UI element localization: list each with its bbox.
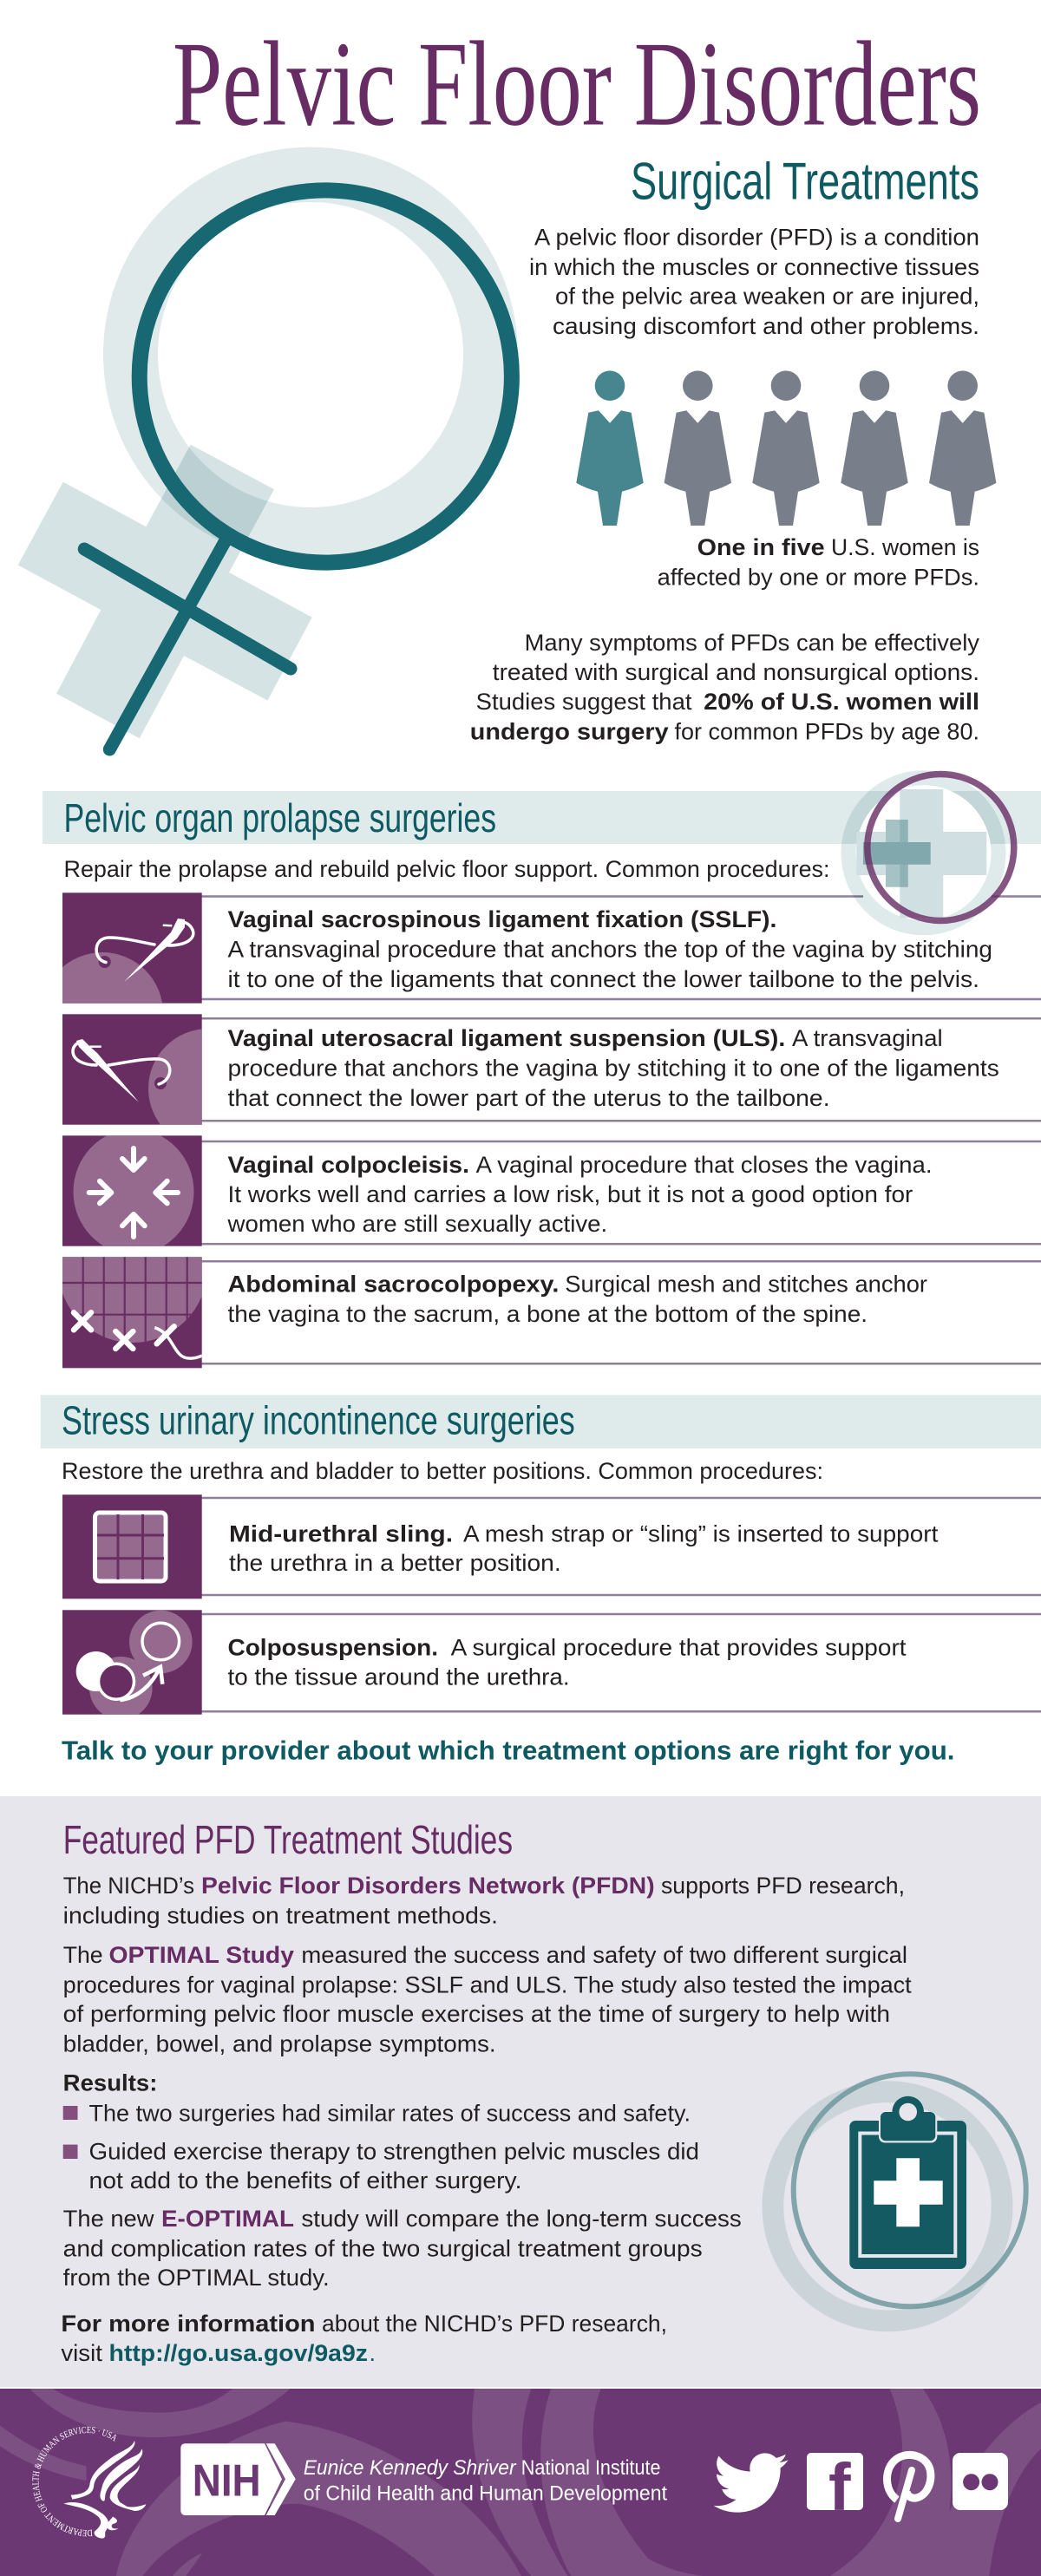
text block: treatment summary: treated with surgical and nonsurgical options. [493,659,979,685]
text block: more information: . [370,2340,376,2366]
icon row: one in five women [576,370,996,526]
logo: NIH [180,2443,296,2515]
text block: OPTIMAL study: The [63,1942,103,1968]
results list: The two surgeries had similar rates of success and safety. [88,2100,691,2126]
icon: lifted urethra [62,1610,202,1720]
results list: Results: [63,2070,157,2096]
text block: treatment summary: for common PFDs by age 80. [675,718,979,744]
text block: E-OPTIMAL: and complication rates of the two surgical treatment groups [63,2236,703,2262]
procedure: colposuspension: to the tissue around the urethra. [227,1664,570,1690]
text block: more information: For more information [61,2311,316,2337]
text block: E-OPTIMAL: The new [63,2206,154,2232]
procedure: mid-urethral sling: A mesh strap or “sling” is inserted to support [463,1520,939,1546]
procedure: ULS: that connect the lower part of the uterus to the tailbone. [227,1085,830,1111]
text block: treatment summary: 20% of U.S. women will [704,689,979,715]
procedure: colpocleisis: women who are still sexually active. [226,1211,607,1237]
text block: definition: in which the muscles or connective tissues [529,254,979,280]
text block: E-OPTIMAL: E-OPTIMAL [161,2206,294,2232]
procedure: ULS [201,1018,1041,1121]
text block: PFDN: including studies on treatment methods. [63,1902,498,1928]
results list: Guided exercise therapy to strengthen pelvic muscles did [88,2139,699,2165]
section heading band [43,791,1041,844]
text block: PFDN [63,1873,905,1928]
procedure: sacrocolpopexy [201,1261,1041,1363]
procedure: colposuspension: Colposuspension. [227,1634,438,1660]
text block: OPTIMAL study: procedures for vaginal prolapse: SSLF and ULS. The study also tested the impact [63,1971,912,1997]
procedure: colposuspension: A surgical procedure that provides support [451,1634,907,1660]
text block: definition: causing discomfort and other problems. [553,313,979,339]
section heading band: Pelvic organ prolapse surgeries [64,795,496,840]
section intro: Restore the urethra and bladder to better positions. Common procedures: [62,1458,823,1484]
section intro: Repair the prolapse and rebuild pelvic floor support. Common procedures: [64,856,829,882]
procedure: colposuspension [201,1614,1041,1711]
text block: one in five [658,534,979,590]
procedure: mid-urethral sling: Mid-urethral sling. [229,1520,453,1546]
text block: PFDN: Pelvic Floor Disorders Network (PFDN) [201,1873,655,1899]
section heading: Featured PFD Treatment Studies [63,1817,513,1862]
procedure: sacrocolpopexy: Abdominal sacrocolpopexy. [227,1272,559,1298]
text block: E-OPTIMAL [63,2206,742,2291]
text block: E-OPTIMAL: study will compare the long-term success [301,2206,742,2232]
text block: OPTIMAL study [63,1942,912,2056]
section heading band: Stress urinary incontinence surgeries [62,1397,575,1442]
icon: facebook [807,2450,863,2525]
text block: more information [61,2311,667,2366]
text block: treatment summary: Many symptoms of PFDs can be effectively [525,630,979,656]
procedure: colpocleisis: It works well and carries a low risk, but it is not a good option for [227,1181,913,1207]
results list [63,2070,699,2194]
icon: needle and thread [62,892,202,1004]
icon: mesh sling [62,1494,202,1599]
text block: PFDN: The NICHD’s [63,1873,194,1899]
text block: E-OPTIMAL: from the OPTIMAL study. [63,2265,330,2291]
icon: flickr [953,2453,1008,2510]
text block: treatment summary: Studies suggest that [476,689,692,715]
icon: female symbol [18,147,518,749]
procedure: mid-urethral sling: the urethra in a better position. [229,1550,561,1576]
text block: definition: A pelvic floor disorder (PFD) is a condition [534,224,979,250]
procedure: ULS: A transvaginal [792,1025,943,1051]
procedure: SSLF: Vaginal sacrospinous ligament fixation (SSLF). [227,906,776,932]
panel: featured PFD treatment studies [0,1796,1041,2387]
callout: talk to provider: Talk to your provider about which treatment options are right for you. [62,1735,954,1765]
text block: OPTIMAL study: of performing pelvic floor muscle exercises at the time of surgery to help with [63,2001,890,2027]
procedure: SSLF: A transvaginal procedure that anchors the top of the vagina by stitching [227,937,992,963]
footer [0,2389,1041,2576]
text block: one in five: U.S. women is [831,534,979,560]
procedure: ULS: Vaginal uterosacral ligament suspension (ULS). [227,1025,785,1051]
text block: more information: visit [61,2340,102,2366]
icon: facebook: f [828,2450,851,2525]
section heading band [41,1395,1041,1448]
text block: OPTIMAL study: bladder, bowel, and prolapse symptoms. [63,2030,496,2056]
results list: not add to the benefits of either surgery. [88,2167,522,2194]
text block: more information: about the NICHD’s PFD research, [322,2311,667,2337]
logo: HHS seal: DEPARTMENT OF HEALTH & HUMAN SERVICES · USA [32,2427,116,2536]
institute name: of Child Health and Human Development [304,2482,667,2506]
icon: inward arrows [62,1135,202,1246]
text block: treatment summary: undergo surgery [470,718,669,744]
procedure: SSLF: it to one of the ligaments that connect the lower tailbone to the pelvis. [227,966,979,992]
icon: surgical mesh [62,1257,202,1369]
text block: OPTIMAL study: OPTIMAL Study [109,1942,294,1968]
institute name [304,2456,667,2506]
panel: pelvic organ prolapse surgeries [42,774,1041,1368]
text block: definition [529,224,979,339]
icon: medical cross emblem [848,774,1014,928]
procedure: colpocleisis [201,1141,1041,1244]
icon: twitter [714,2453,788,2513]
text block: PFDN: supports PFD research, [661,1873,905,1899]
procedure: colpocleisis: Vaginal colpocleisis. [227,1152,469,1178]
text block: definition: of the pelvic area weaken or are injured, [555,284,979,310]
procedure: sacrocolpopexy: the vagina to the sacrum, a bone at the bottom of the spine. [227,1301,868,1327]
institute name: Eunice Kennedy Shriver [304,2456,517,2480]
panel: stress urinary incontinence surgeries [41,1395,1041,1765]
procedure: colpocleisis: A vaginal procedure that closes the vagina. [476,1152,932,1178]
logo: NIH: NIH [193,2456,261,2507]
institute name: National Institute [521,2456,661,2480]
icon: pinterest [887,2455,931,2519]
icon: clipboard [773,2074,1026,2321]
icon: needle and thread mirrored [62,1014,202,1125]
text block: one in five: One in five [697,534,825,560]
procedure: ULS: procedure that anchors the vagina by stitching it to one of the ligaments [227,1055,999,1081]
text block: one in five: affected by one or more PFDs. [658,564,979,590]
text block: more information: http://go.usa.gov/9a9z [109,2340,368,2366]
text block: OPTIMAL study: measured the success and safety of two different surgical [301,1942,907,1968]
procedure: mid-urethral sling [201,1498,1041,1595]
text block: treatment summary [470,630,979,744]
procedure: SSLF [201,897,1041,999]
procedure: sacrocolpopexy: Surgical mesh and stitches anchor [565,1272,927,1298]
